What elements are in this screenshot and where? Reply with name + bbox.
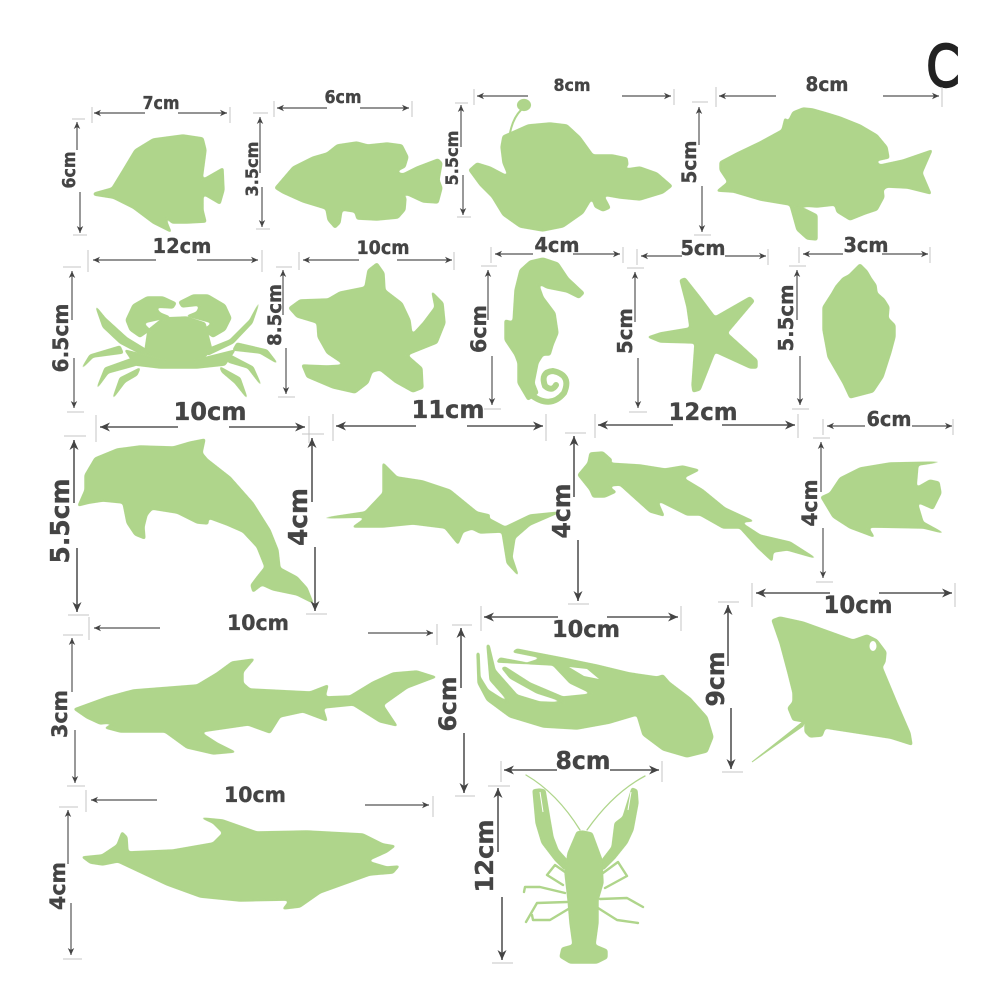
- dimension: 3.5cm height: [243, 113, 270, 229]
- dimension: 4cm height: 4cm: [46, 862, 71, 910]
- dimension: 8cm width: [501, 746, 662, 782]
- sticker: angelfish: [821, 462, 943, 537]
- dimension: 11cm width: [333, 395, 546, 441]
- dimension: 12cm width: 12cm: [152, 234, 212, 258]
- dimension: 5.5cm height: [46, 436, 89, 615]
- dimension: 10cm width: 10cm: [824, 591, 892, 619]
- dimension: 6cm height: 6cm: [434, 676, 462, 732]
- sticker: swimming dolphin: [82, 818, 399, 909]
- dimension: 5cm height: [613, 268, 647, 412]
- dimension: 8cm width: [716, 73, 942, 107]
- dimension: 6cm height: [434, 625, 475, 796]
- dimension: 8cm width: 8cm: [806, 73, 848, 96]
- dimension: 7cm width: [92, 94, 230, 123]
- dimension: 10cm width: [86, 783, 433, 817]
- dimension: 10cm width: 10cm: [174, 397, 246, 426]
- sticker: butterfly fish: [94, 135, 224, 232]
- dimension: 5cm height: [678, 102, 711, 235]
- sticker: sea turtle: [289, 263, 445, 393]
- sticker: crayfish: [524, 775, 645, 963]
- dimension: 4cm height: [798, 438, 833, 582]
- sticker: crab: [82, 295, 277, 398]
- dimension: 6.5cm height: 6.5cm: [49, 304, 73, 372]
- dimension: 8.5cm height: 8.5cm: [264, 284, 286, 346]
- dimension: 6cm height: [60, 119, 87, 235]
- dimension: 6cm width: 6cm: [866, 407, 912, 431]
- dimension: 4cm height: 4cm: [284, 488, 314, 546]
- dimension: 12cm width: [595, 398, 798, 438]
- sticker: round fish: [275, 142, 442, 228]
- dimension: 8cm width: 8cm: [554, 76, 590, 96]
- dimension: 5.5cm height: [774, 266, 809, 409]
- dimension: 8cm width: 8cm: [556, 746, 610, 775]
- dimension: 5.5cm height: 5.5cm: [46, 478, 76, 564]
- dimension: 6cm width: [274, 88, 412, 117]
- dimension: 5cm width: [637, 236, 768, 265]
- dimension: 10cm width: [96, 397, 324, 443]
- dimension: 5cm width: 5cm: [680, 236, 726, 260]
- sticker: swordfish: [325, 463, 560, 575]
- dimension: 3cm height: [48, 635, 85, 786]
- dimension: 10cm width: [481, 606, 681, 643]
- dimension: 3cm height: 3cm: [48, 690, 73, 738]
- dimension: 10cm width: 10cm: [224, 783, 286, 808]
- dimension: 3cm width: [799, 233, 930, 263]
- dimension: 9cm height: [701, 602, 743, 772]
- dimension: 8.5cm height: [264, 267, 295, 397]
- dimension: 4cm height: 4cm: [547, 484, 576, 538]
- dimension: 6cm height: [467, 266, 501, 409]
- dimension: 10cm width: [299, 238, 454, 270]
- dimension: 8cm width: [474, 76, 674, 105]
- dimension: 4cm height: 4cm: [798, 480, 822, 526]
- dimension: 7cm width: 7cm: [142, 94, 180, 114]
- dimension: 4cm height: [547, 433, 589, 604]
- dimension: 6.5cm height: [49, 267, 84, 412]
- dimension: 9cm height: 9cm: [701, 652, 730, 706]
- dimension: 10cm width: 10cm: [552, 615, 620, 643]
- dimension: 5.5cm height: 5.5cm: [443, 130, 463, 186]
- dimension: 3cm width: 3cm: [844, 233, 888, 257]
- dimension: 6cm width: 6cm: [324, 88, 362, 108]
- sticker: starfish: [648, 278, 757, 392]
- sticker: stingray: [752, 617, 912, 762]
- dimension: 10cm width: 10cm: [356, 238, 410, 259]
- dimension: 10cm width: [89, 611, 437, 645]
- sticker: conch shell: [823, 264, 895, 398]
- dimension: 5cm height: 5cm: [613, 308, 637, 354]
- dimension: 12cm height: 12cm: [470, 820, 499, 892]
- dimension: 12cm width: 12cm: [668, 398, 738, 426]
- dimension: 12cm width: [88, 234, 262, 272]
- sticker: hammerhead shark: [578, 452, 815, 561]
- sticker: leaping dolphin: [78, 439, 313, 603]
- dimension: 4cm height: [46, 807, 82, 959]
- dimension: 3.5cm height: 3.5cm: [243, 142, 263, 196]
- sticker: octopus: [477, 645, 713, 757]
- dimension: 4cm width: [491, 233, 623, 263]
- dimension: 11cm width: 11cm: [412, 395, 484, 424]
- dimension: 5.5cm height: 5.5cm: [774, 284, 798, 352]
- dimension: 4cm width: 4cm: [534, 233, 580, 257]
- dimension: 6cm height: 6cm: [467, 305, 491, 353]
- sticker: anglerfish: [469, 100, 672, 231]
- dimension: 10cm width: [752, 583, 955, 619]
- dimension: 6cm height: 6cm: [60, 152, 80, 188]
- dimension: 5.5cm height: [443, 103, 471, 217]
- set letter C: C: [926, 34, 960, 100]
- dimension: 5cm height: 5cm: [678, 140, 701, 184]
- sticker: shark: [74, 659, 436, 754]
- dimension: 6cm width: [823, 407, 953, 435]
- sticker: large reef fish: [717, 108, 932, 240]
- dimension: 10cm width: 10cm: [227, 611, 289, 636]
- sticker: seahorse: [505, 258, 584, 402]
- dimension: 12cm height: [470, 786, 513, 963]
